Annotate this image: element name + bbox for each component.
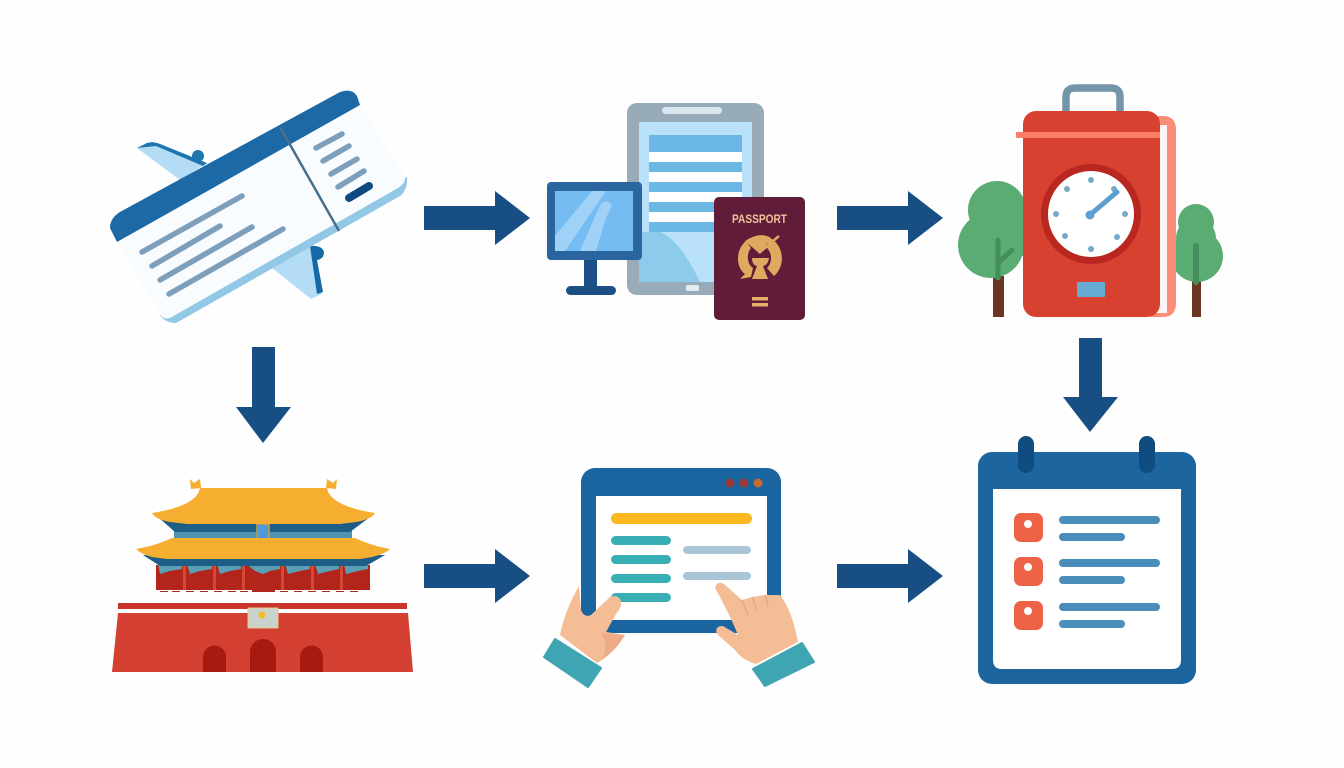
icon: left hand xyxy=(560,586,625,663)
icon: Tiananmen gate xyxy=(112,479,413,672)
icon: hands holding tablet xyxy=(544,468,814,687)
icon: luggage with clock and trees xyxy=(958,88,1223,317)
icon: plane ticket xyxy=(110,91,407,323)
icon: desktop monitor xyxy=(547,182,642,295)
arrow: documents to luggage xyxy=(837,191,943,245)
arrow: luggage down to calendar xyxy=(1063,338,1118,432)
icon: passport: PASSPORT xyxy=(732,212,788,226)
icon: calendar checklist xyxy=(978,436,1196,684)
lower roof xyxy=(136,538,390,559)
arrow: gate to tablet xyxy=(424,549,530,603)
arrow: ticket down to gate xyxy=(236,347,291,443)
wall xyxy=(112,613,413,672)
arrow: ticket to documents xyxy=(424,191,530,245)
icon: right tree xyxy=(1171,204,1223,317)
icon: right cuff xyxy=(753,643,814,686)
icon: left tree xyxy=(958,181,1040,317)
icon: right hand xyxy=(715,583,798,664)
icon: passport xyxy=(714,197,805,320)
upper roof xyxy=(152,488,375,524)
icon: tablet with form xyxy=(627,103,764,295)
arrow: tablet to calendar xyxy=(837,549,943,603)
icon: devices and passport xyxy=(547,103,805,320)
icon: left cuff xyxy=(544,639,601,687)
